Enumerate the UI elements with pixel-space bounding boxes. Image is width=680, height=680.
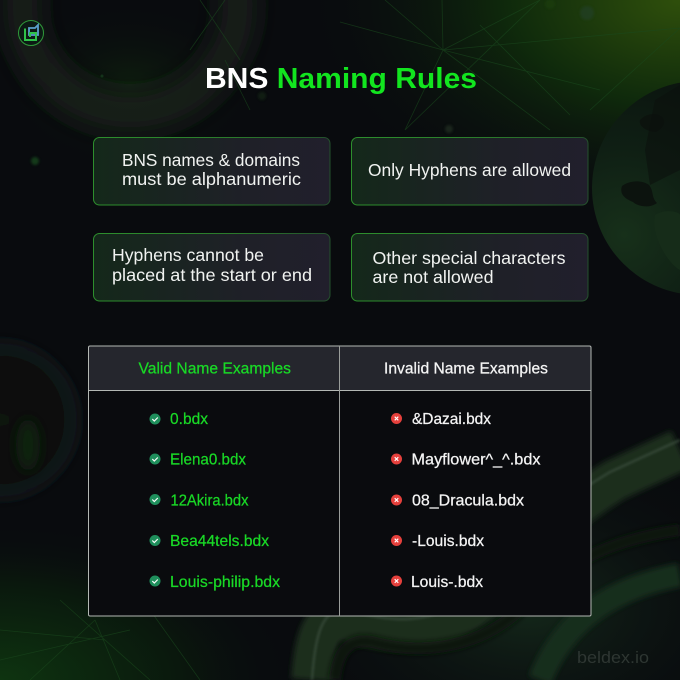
header: valid: Valid Name Examples xyxy=(138,360,291,378)
card: hyphens allowed: Only Hyphens are allowed xyxy=(368,160,571,180)
card: alphanumeric xyxy=(94,138,330,205)
card: special characters: Other special characters xyxy=(372,248,566,268)
header: invalid: Invalid Name Examples xyxy=(384,360,548,378)
card: alphanumeric: must be alphanumeric xyxy=(122,169,301,189)
card: special characters: are not allowed xyxy=(372,267,494,287)
valid column: Elena0.bdx xyxy=(170,452,246,468)
valid column: 0.bdx xyxy=(170,411,208,428)
valid column: 12Akira.bdx xyxy=(170,492,248,510)
card: hyphen placement xyxy=(94,234,330,301)
invalid column: Louis-.bdx xyxy=(411,574,483,591)
invalid column: 08_Dracula.bdx xyxy=(412,492,524,510)
valid column xyxy=(150,411,280,591)
card: hyphens allowed xyxy=(352,138,588,205)
invalid column: &Dazai.bdx xyxy=(412,411,491,428)
left sphere xyxy=(0,342,78,498)
invalid column: -Louis.bdx xyxy=(412,533,484,550)
invalid column xyxy=(391,411,540,591)
card: hyphen placement: Hyphens cannot be xyxy=(112,245,264,265)
title: BNS Naming Rules xyxy=(205,63,477,95)
invalid column: Mayflower^_^.bdx xyxy=(412,452,540,468)
examples table xyxy=(88,346,591,616)
card: special characters xyxy=(352,234,588,301)
logo xyxy=(18,20,44,46)
valid column: Louis-philip.bdx xyxy=(170,574,280,591)
watermark: beldex.io xyxy=(577,648,649,667)
valid column: Bea44tels.bdx xyxy=(170,533,269,550)
globe xyxy=(592,81,680,295)
card: hyphen placement: placed at the start or end xyxy=(112,265,312,285)
card: alphanumeric: BNS names & domains xyxy=(122,150,300,170)
wave decoration xyxy=(312,440,680,680)
